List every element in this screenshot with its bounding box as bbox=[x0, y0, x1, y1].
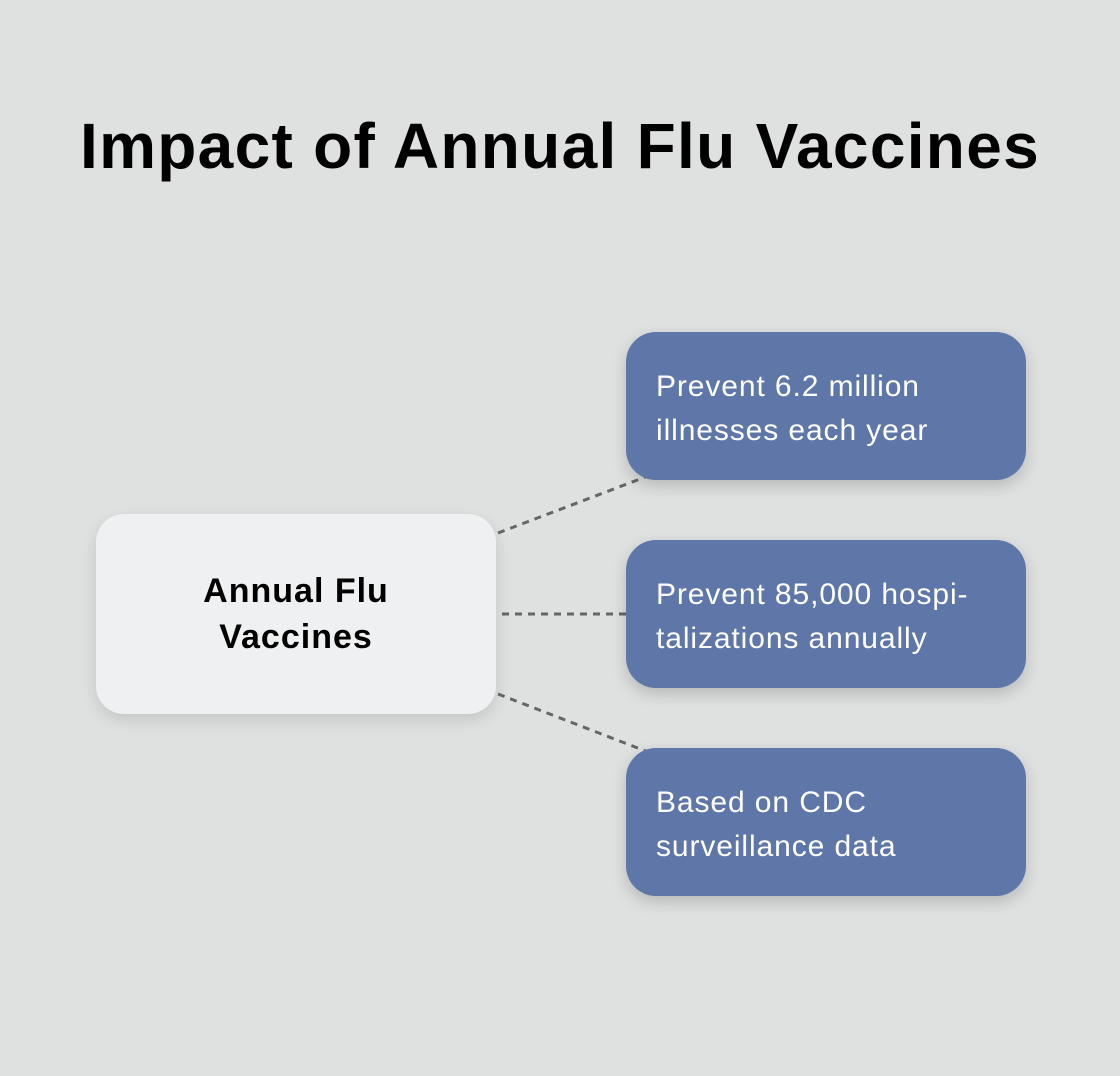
box: illnesses bbox=[626, 332, 1026, 480]
center node: Annual Flu bbox=[203, 572, 389, 610]
box: source bbox=[626, 748, 1026, 896]
box: hospitalizations bbox=[626, 540, 1026, 688]
box: illnesses: Prevent 6.2 million illnesses each year bbox=[656, 370, 928, 447]
box: source: Based on CDC surveillance data bbox=[656, 786, 896, 863]
center node: Vaccines bbox=[219, 618, 373, 656]
center node bbox=[96, 514, 496, 714]
title: Impact of Annual Flu Vaccines bbox=[80, 110, 1040, 182]
box: hospitalizations: Prevent 85,000 hospi-talizations annually bbox=[656, 578, 968, 655]
